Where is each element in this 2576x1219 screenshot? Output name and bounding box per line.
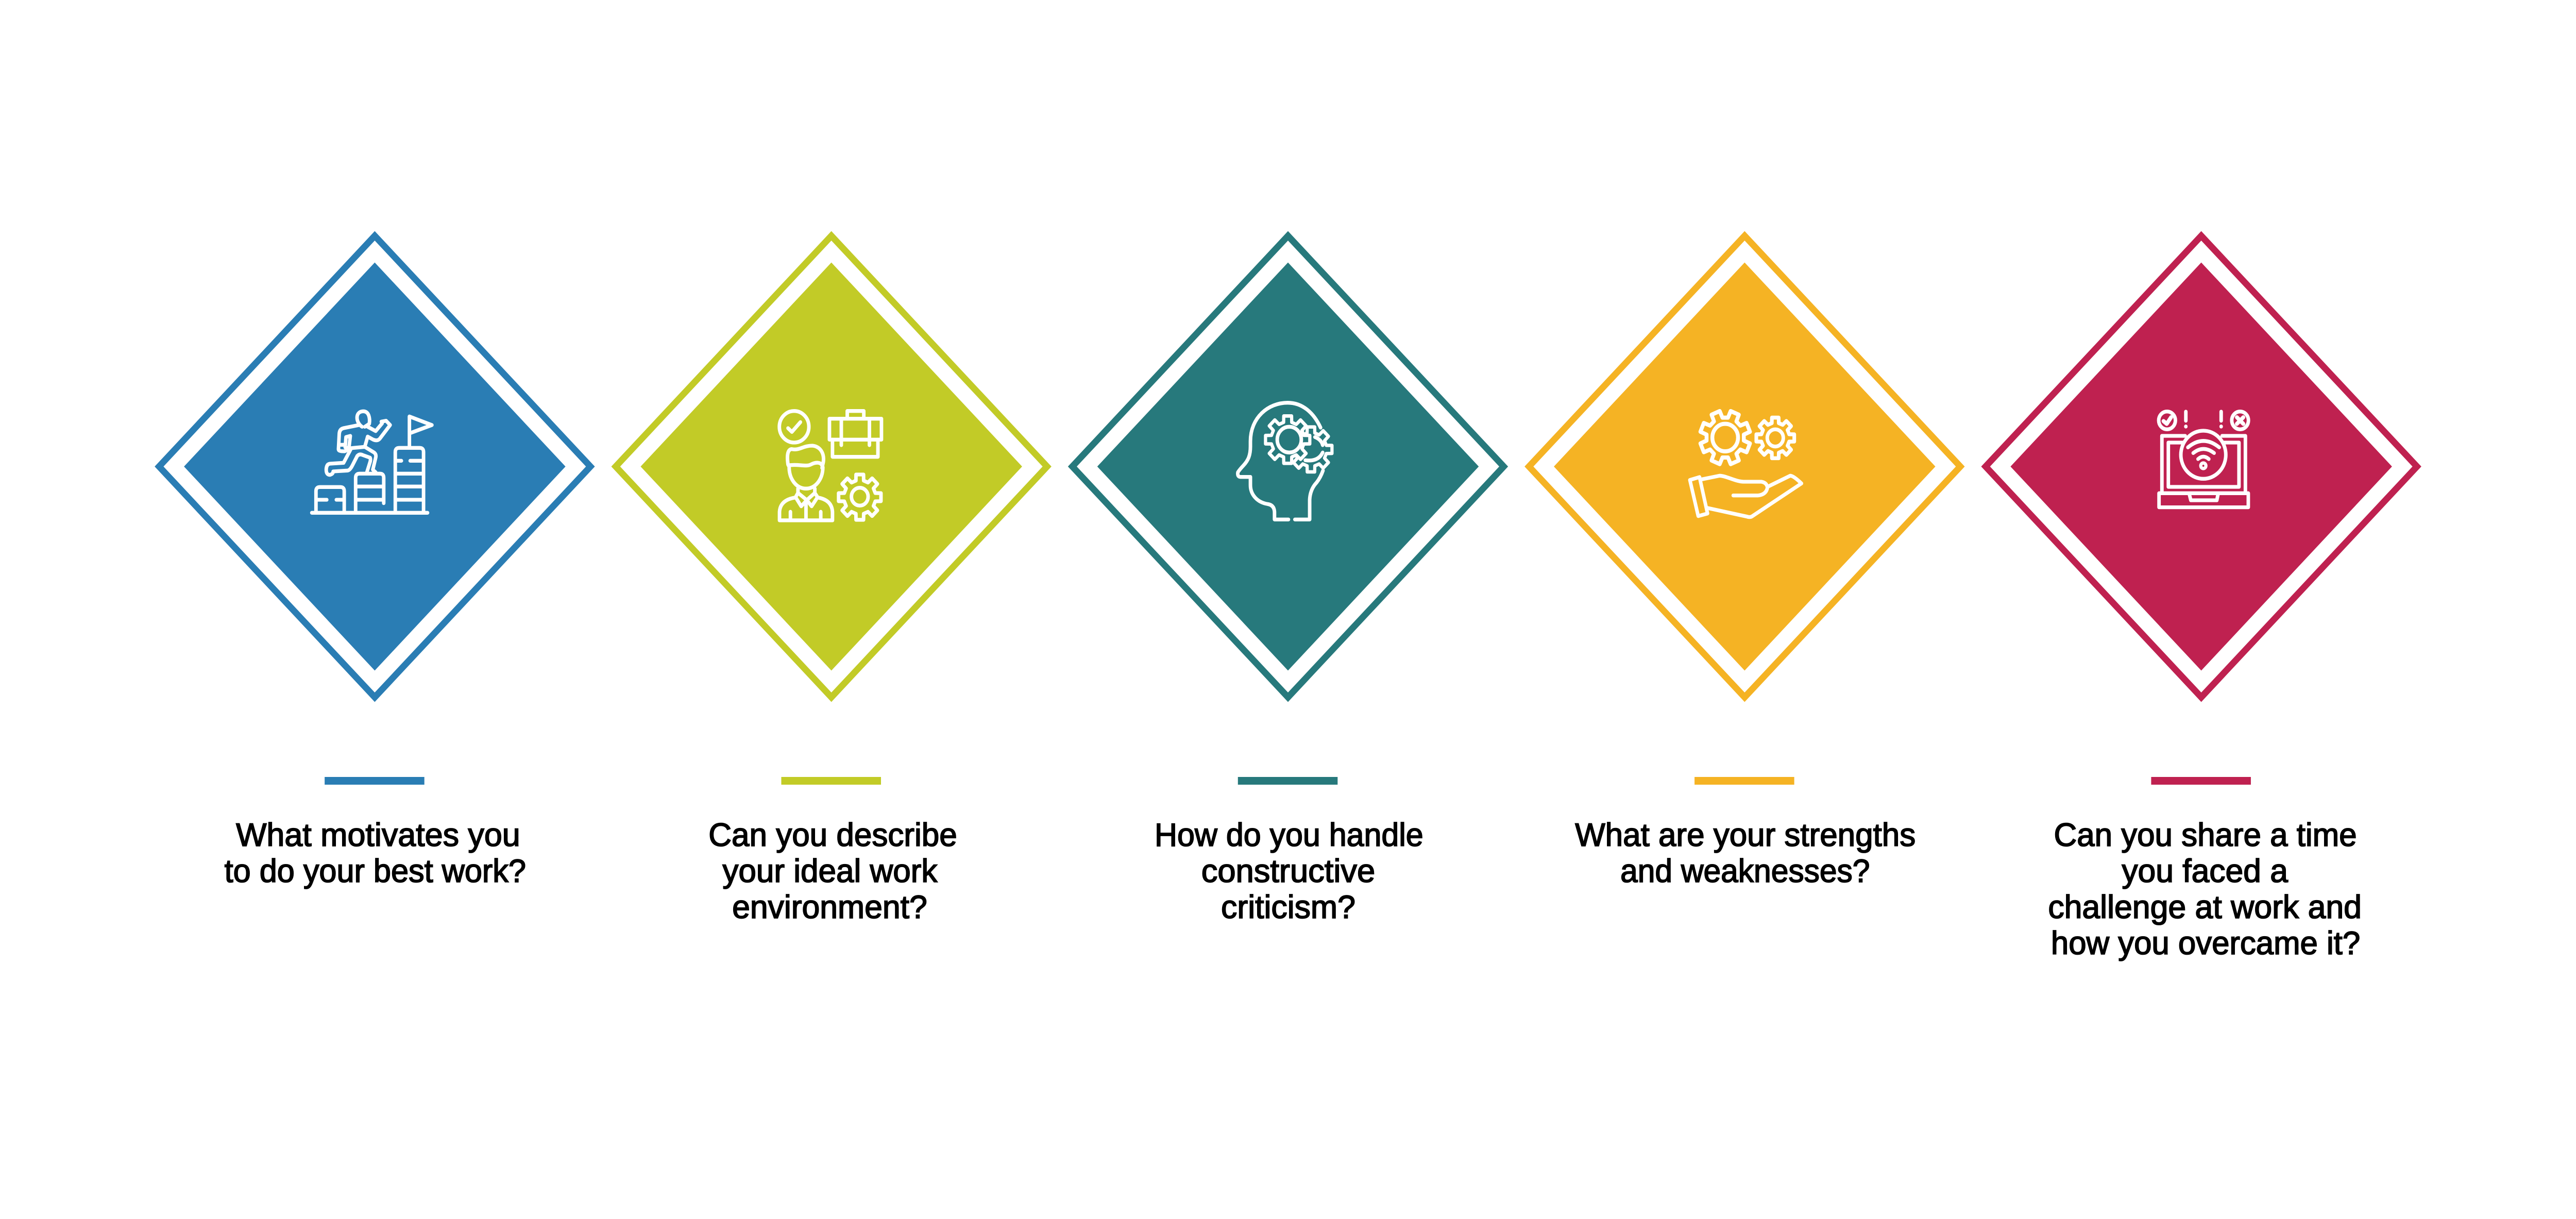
accent bar: lime: [781, 777, 881, 785]
icon: person climbing stacked steps to a flag: [312, 411, 432, 513]
panel: criticism question: [1072, 236, 1504, 925]
accent bar: blue: [325, 777, 425, 785]
accent bar: amber: [1694, 777, 1794, 785]
diamond: amber: [1529, 236, 1960, 697]
question text 5: how you overcame it?: [2051, 925, 2360, 961]
question text 2: environment?: [732, 889, 927, 925]
panel: strengths question: [1529, 236, 1960, 889]
question text 5: Can you share a time: [2054, 817, 2357, 853]
question text 1: [225, 817, 526, 889]
panel: work environment question: [616, 236, 1047, 925]
question text 1: to do your best work?: [225, 853, 526, 889]
icon: open hand with two gears: [1690, 403, 1802, 517]
question text 4: [1575, 817, 1916, 889]
diamond: teal: [1072, 236, 1504, 697]
diamond: lime: [616, 236, 1047, 697]
question text 3: How do you handle: [1155, 817, 1423, 853]
question text 4: and weaknesses?: [1620, 853, 1870, 889]
accent bar: crimson: [2151, 777, 2251, 785]
question text 4: What are your strengths: [1575, 817, 1916, 853]
question text 5: you faced a: [2122, 853, 2288, 889]
question text 3: [1155, 817, 1423, 925]
question text 3: constructive: [1201, 853, 1375, 889]
question text 2: [708, 817, 957, 925]
question text 2: Can you describe: [708, 817, 957, 853]
question text 3: criticism?: [1221, 889, 1355, 925]
accent bar: teal: [1238, 777, 1337, 785]
panel: motivation question: [159, 236, 590, 889]
question text 5: [2048, 817, 2362, 961]
icon: head with gears: [1238, 403, 1332, 519]
diamond: blue: [159, 236, 590, 697]
diamond: crimson: [1986, 236, 2417, 697]
panel: challenge question: [1986, 236, 2417, 961]
question text 2: your ideal work: [722, 853, 938, 889]
icon: laptop with wifi and alerts: [2159, 412, 2248, 507]
question text 5: challenge at work and: [2048, 889, 2362, 925]
icon: employee with check mark, briefcase and gear: [779, 411, 882, 520]
question text 1: What motivates you: [236, 817, 520, 853]
